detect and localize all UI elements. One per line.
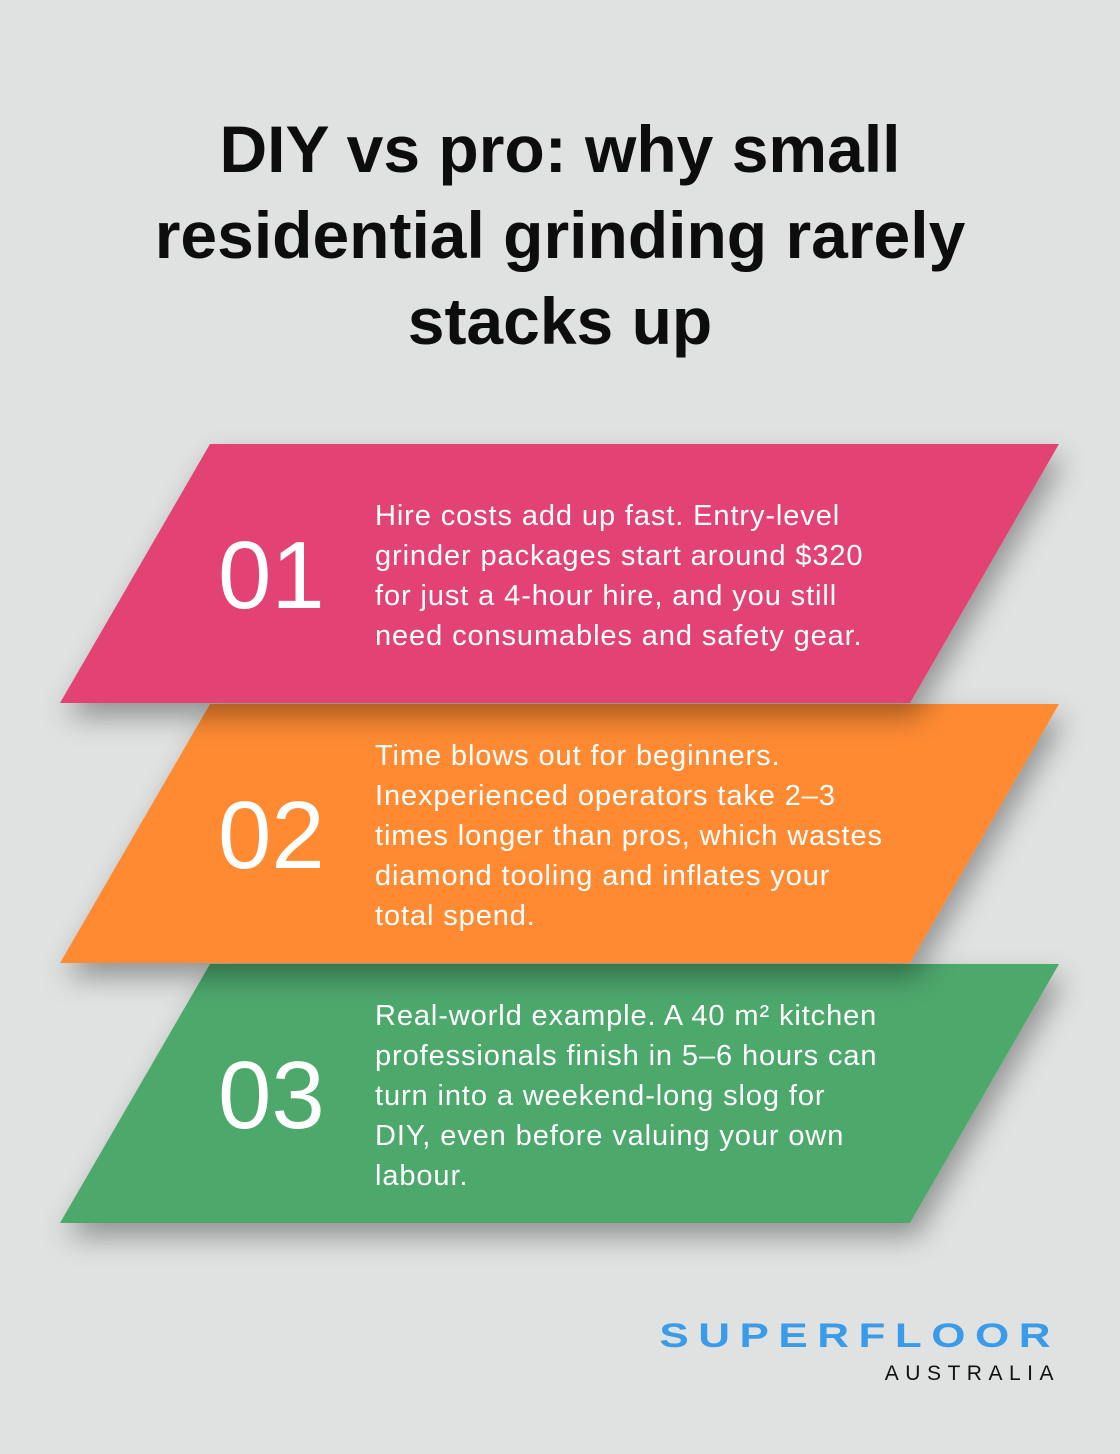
- title: [155, 112, 965, 358]
- text 02: times longer than pros, which wastes: [375, 820, 883, 852]
- logo: [659, 1317, 1060, 1385]
- text 01: [375, 500, 863, 652]
- text 03: [375, 1000, 877, 1192]
- logo: SUPERFLOOR: [659, 1317, 1060, 1355]
- text 03: professionals finish in 5–6 hours can: [375, 1040, 877, 1072]
- logo: AUSTRALIA: [885, 1362, 1060, 1385]
- title: stacks up: [408, 284, 712, 358]
- text 02: [375, 740, 883, 932]
- text 02: Time blows out for beginners.: [375, 740, 780, 772]
- title: DIY vs pro: why small: [219, 112, 900, 186]
- text 01: grinder packages start around $320: [375, 540, 863, 572]
- number 03: 03: [218, 1042, 325, 1149]
- text 01: Hire costs add up fast. Entry-level: [375, 500, 840, 532]
- text 02: Inexperienced operators take 2–3: [375, 780, 836, 812]
- text 03: labour.: [375, 1160, 468, 1192]
- text 02: diamond tooling and inflates your: [375, 860, 830, 892]
- text 03: DIY, even before valuing your own: [375, 1120, 844, 1152]
- panel: 01 shape: [60, 444, 1059, 703]
- number 01: 01: [218, 522, 325, 629]
- text 01: for just a 4-hour hire, and you still: [375, 580, 837, 612]
- number 02: 02: [218, 782, 325, 889]
- text 03: Real-world example. A 40 m² kitchen: [375, 1000, 877, 1032]
- text 02: total spend.: [375, 900, 536, 932]
- text 03: turn into a weekend-long slog for: [375, 1080, 825, 1112]
- panel: 02 shape: [60, 704, 1059, 963]
- title: residential grinding rarely: [155, 198, 965, 272]
- text 01: need consumables and safety gear.: [375, 620, 863, 652]
- panel: 03 shape: [60, 964, 1059, 1223]
